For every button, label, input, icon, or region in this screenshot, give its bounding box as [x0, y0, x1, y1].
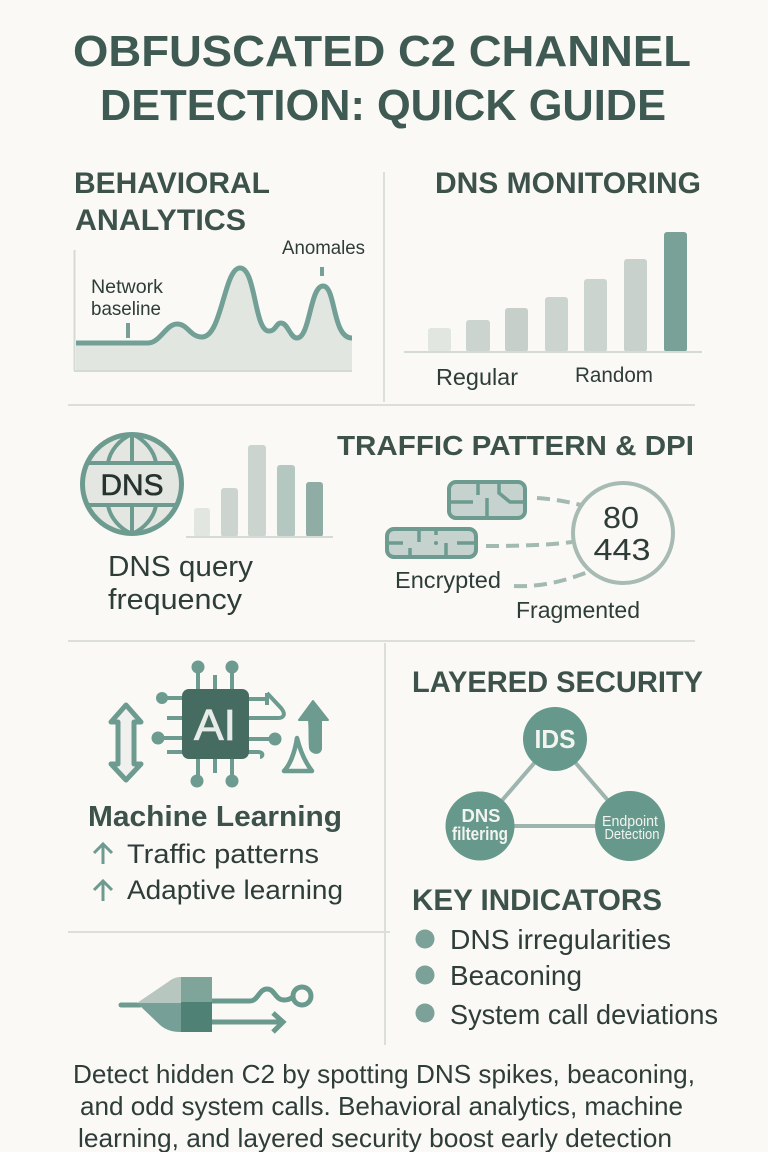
icon: ai chip [152, 660, 284, 788]
label: network baseline: Network [91, 276, 163, 298]
panel: behavioral analytics [74, 167, 365, 371]
heading: machine learning: Machine Learning [88, 801, 342, 833]
summary text: and odd system calls. Behavioral analytics, machine [80, 1091, 683, 1121]
panel: machine learning [88, 660, 343, 905]
diagram: security triangle [446, 707, 665, 861]
port circle 80 443: 80 [603, 500, 639, 535]
panel: dns query frequency [82, 434, 333, 616]
node: endpoint detection: Detection [604, 827, 660, 843]
area chart: network baseline and anomalies [74, 238, 365, 371]
heading: key indicators: KEY INDICATORS [412, 884, 662, 917]
node: endpoint detection: Endpoint [602, 814, 658, 830]
node: endpoint detection [595, 791, 665, 861]
title [73, 27, 691, 130]
label: fragmented: Fragmented [516, 597, 640, 623]
label: dns query frequency [108, 551, 254, 616]
title: DETECTION: QUICK GUIDE [100, 81, 666, 130]
label: network baseline: baseline [91, 298, 161, 320]
icon: encrypted packet top [449, 482, 525, 518]
port circle 80 443: 443 [594, 532, 650, 567]
title: OBFUSCATED C2 CHANNEL [73, 27, 691, 76]
panel: key indicators [412, 884, 718, 1030]
heading: layered security: LAYERED SECURITY [412, 666, 703, 699]
label: random: Random [575, 364, 653, 387]
node: ids [523, 707, 587, 771]
heading: behavioral analytics: BEHAVIORAL [74, 167, 270, 200]
label: dns query frequency: frequency [108, 584, 243, 616]
heading: behavioral analytics [74, 167, 270, 237]
icon: triangle [284, 738, 312, 771]
panel: traffic pattern and dpi [337, 430, 694, 623]
node: dns filtering [446, 792, 514, 860]
item: dns irregularities: DNS irregularities [450, 924, 671, 955]
heading: dns monitoring: DNS MONITORING [435, 167, 701, 200]
item: adaptive learning: Adaptive learning [127, 875, 343, 905]
icon: double arrow [111, 705, 141, 780]
icon: encrypted packet bottom [387, 529, 476, 557]
panel: layered security [412, 666, 703, 861]
label: network baseline [91, 276, 163, 320]
node: dns filtering: DNS [462, 805, 500, 826]
dashed connectors [486, 498, 588, 586]
bar chart: regular to random [404, 232, 702, 390]
port circle 80 443 [573, 483, 673, 583]
item: system call deviations: System call deviations [450, 999, 718, 1030]
item: beaconing: Beaconing [450, 960, 582, 991]
icon: up arrow [299, 701, 328, 753]
label: encrypted: Encrypted [395, 567, 501, 593]
summary text [73, 1059, 695, 1152]
item: traffic patterns: Traffic patterns [127, 839, 319, 869]
bar chart: dns query frequency [186, 445, 333, 537]
icon: ai chip: AI [194, 701, 236, 750]
node: ids: IDS [534, 724, 576, 754]
summary text: Detect hidden C2 by spotting DNS spikes, beaconing, [73, 1059, 695, 1089]
heading: behavioral analytics: ANALYTICS [75, 204, 246, 237]
label: dns query frequency: DNS query [108, 551, 254, 583]
label: anomalies: Anomales [282, 238, 365, 259]
icon: dns globe: DNS [100, 469, 164, 502]
panel: dns monitoring [404, 167, 702, 390]
icon: dns globe [82, 434, 182, 534]
node: dns filtering: filtering [452, 824, 508, 844]
heading: traffic pattern and dpi: TRAFFIC PATTERN & DPI [337, 430, 694, 461]
label: regular: Regular [436, 364, 518, 390]
icon: signal gate [121, 977, 311, 1032]
